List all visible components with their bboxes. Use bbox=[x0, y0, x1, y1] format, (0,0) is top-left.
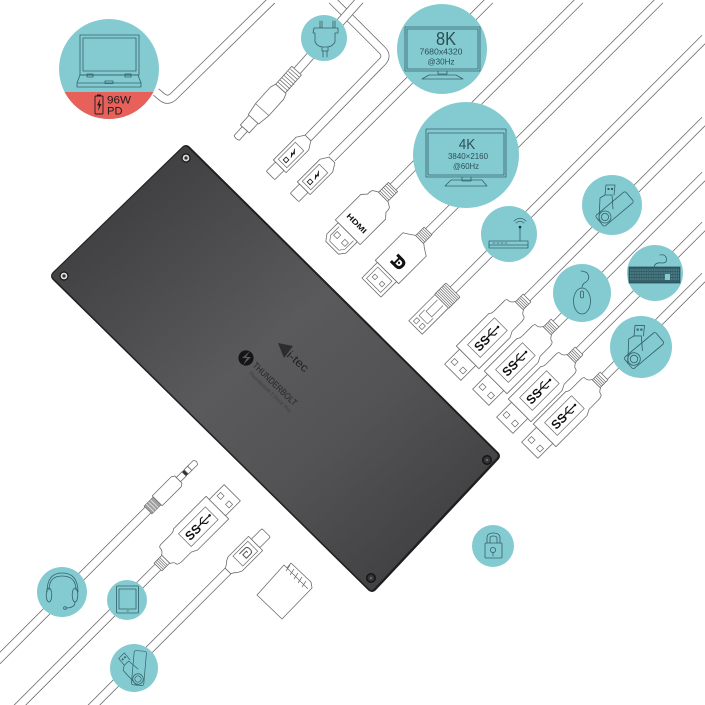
icon: monitor bbox=[405, 27, 480, 79]
icon: tablet bbox=[116, 586, 138, 613]
thunderbolt logo bbox=[238, 350, 254, 366]
heading: 4K: 4K bbox=[459, 136, 475, 153]
icon: battery bbox=[95, 94, 103, 114]
connector: USB 3 port 1: SS bbox=[471, 333, 493, 354]
icon: USB stick bbox=[624, 325, 664, 369]
connector: RJ45 bbox=[408, 283, 460, 335]
connector: thunderbolt 2 bbox=[288, 154, 338, 204]
icon: mouse bbox=[574, 271, 590, 314]
connector: USB 3 port 1 bbox=[441, 287, 538, 384]
panel: security lock bbox=[472, 525, 514, 567]
heading: 8K: 8K bbox=[436, 29, 456, 49]
icon: headset bbox=[46, 573, 78, 609]
connector: USB 3 port 4: SS bbox=[548, 411, 570, 432]
panel: 8K display bbox=[397, 4, 487, 94]
panel: network router bbox=[481, 206, 537, 262]
icon: router bbox=[489, 218, 528, 248]
panel: 4K display bbox=[413, 102, 519, 208]
connector: HDMI: HDMI bbox=[345, 211, 369, 235]
connector: USB 3 port 3: SS bbox=[523, 386, 545, 407]
connector: USB 3 port 4 bbox=[518, 365, 615, 462]
icon: laptop bbox=[77, 35, 141, 87]
connector: power barrel bbox=[229, 65, 304, 145]
power label 96W: 96W bbox=[107, 94, 132, 106]
refresh rate: @60Hz bbox=[453, 162, 479, 171]
panel: mouse bbox=[553, 264, 611, 322]
icon: plug bbox=[313, 21, 338, 57]
panel: USB stick 2 bbox=[610, 316, 672, 378]
panel: power plug bbox=[301, 15, 347, 61]
connector: thunderbolt 1 bbox=[264, 132, 314, 182]
icon: padlock bbox=[485, 533, 502, 558]
screw: bottom bbox=[366, 573, 376, 583]
panel: headset bbox=[37, 567, 87, 617]
i-tec logo: i-tec bbox=[284, 349, 311, 375]
screw: right bbox=[482, 455, 492, 465]
connector: audio jack bbox=[143, 457, 201, 515]
panel: keyboard bbox=[627, 245, 683, 301]
connector: USB 3 downstream bbox=[147, 481, 244, 578]
connector: DisplayPort bbox=[360, 219, 440, 299]
connector: USB 3 port 2 bbox=[469, 312, 566, 409]
panel: USB stick 1 bbox=[582, 175, 642, 235]
panel: laptop 96W PD bbox=[59, 19, 159, 119]
refresh rate: @30Hz bbox=[428, 57, 454, 66]
thunderbolt label: THUNDERBOLT bbox=[251, 360, 300, 408]
connector: USB 3 downstream: SS bbox=[182, 522, 204, 543]
thunderbolt sub-label: Thunderbolt 3 Dock Pro bbox=[247, 370, 292, 414]
dock device bbox=[55, 150, 495, 587]
screw: left bbox=[59, 271, 69, 281]
panel: USB stick 3 bbox=[110, 641, 162, 692]
icon: USB stick bbox=[595, 185, 634, 227]
icon: USB stick bbox=[112, 641, 162, 691]
connector: USB 3 port 2: SS bbox=[499, 358, 521, 379]
icon: SD card bbox=[257, 563, 312, 619]
resolution: 7680x4320 bbox=[420, 48, 463, 56]
power label PD: PD bbox=[107, 106, 123, 118]
i-tec logo bbox=[278, 343, 311, 375]
icon: monitor bbox=[426, 129, 506, 186]
screw: top bbox=[181, 153, 191, 163]
panel: tablet bbox=[107, 580, 147, 620]
resolution: 3840×2160 bbox=[448, 152, 489, 161]
icon: keyboard bbox=[629, 255, 680, 283]
connector: USB-C downstream bbox=[221, 526, 273, 578]
connector: HDMI bbox=[320, 175, 405, 260]
connector: USB 3 port 3 bbox=[493, 340, 590, 437]
